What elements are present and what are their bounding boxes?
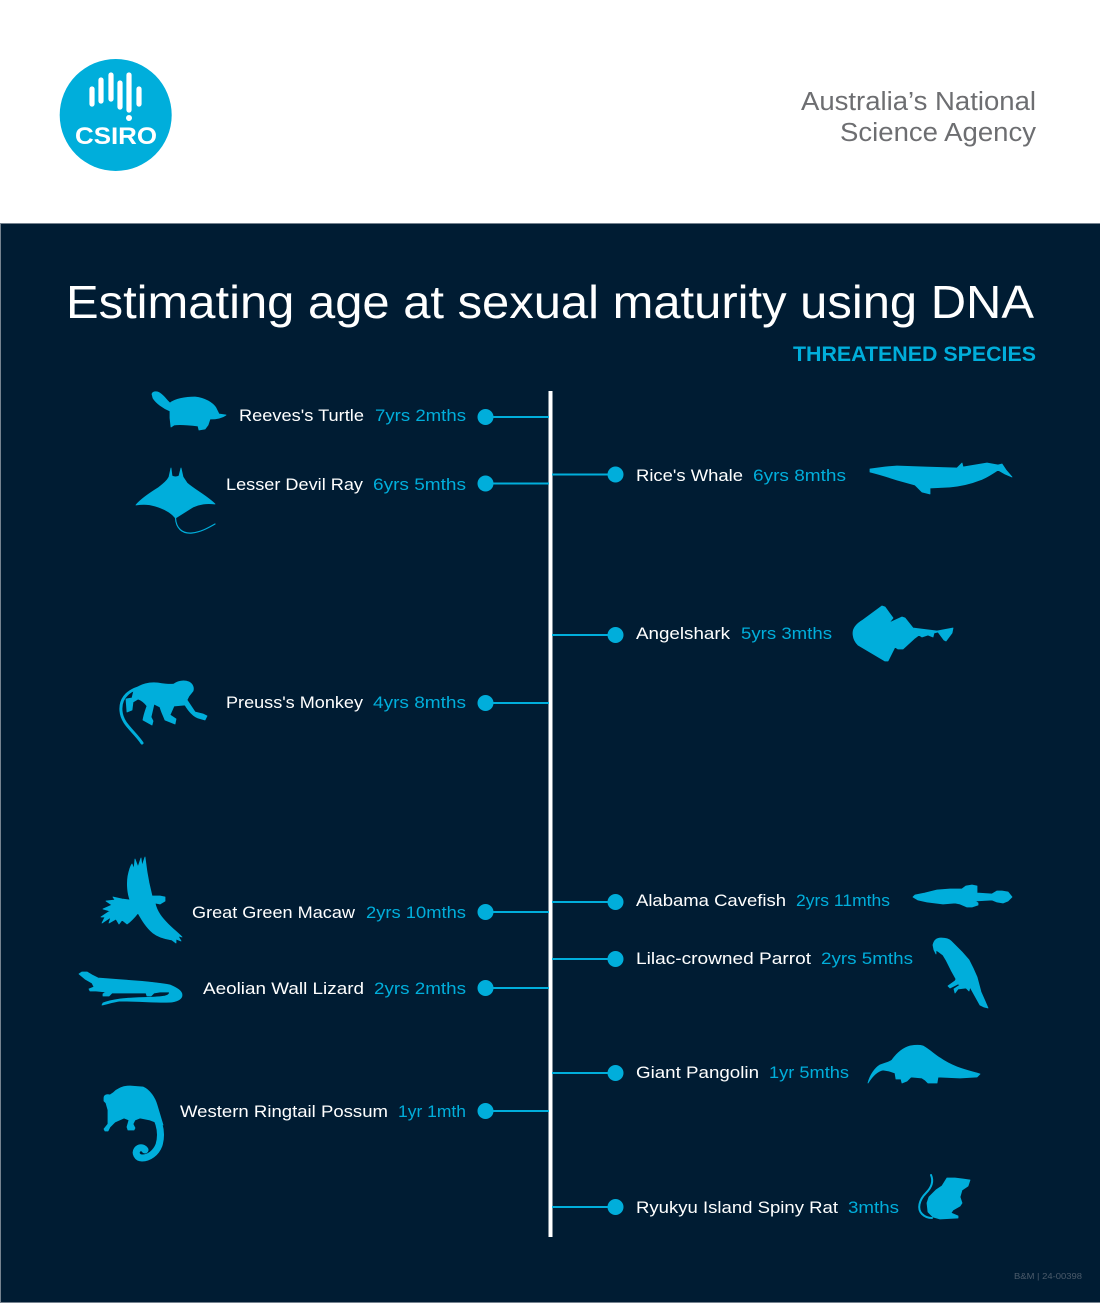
timeline axis xyxy=(548,391,552,1237)
entry: Preuss's Monkey: Preuss's Monkey xyxy=(226,694,364,712)
entry: Western Ringtail Possum xyxy=(104,1086,549,1158)
entry: Reeves's Turtle: 7yrs 2mths xyxy=(375,407,466,425)
CSIRO logo xyxy=(60,59,172,171)
entry: Lilac-crowned Parrot xyxy=(552,938,988,1008)
entry: Alabama Cavefish xyxy=(552,885,1012,910)
entry: Aeolian Wall Lizard: 2yrs 2mths xyxy=(374,980,466,998)
header band xyxy=(0,0,1100,223)
entry: Reeves's Turtle: Reeves's Turtle xyxy=(239,407,364,425)
entry: Giant Pangolin xyxy=(552,1045,980,1083)
entry: Lilac-crowned Parrot: 2yrs 5mths xyxy=(821,950,913,968)
entry: Lilac-crowned Parrot: Lilac-crowned Parrot xyxy=(636,950,811,968)
entry: Reeves's Turtle xyxy=(152,392,549,430)
entry: Rice's Whale: 6yrs 8mths xyxy=(753,467,846,485)
tagline xyxy=(801,88,1036,147)
entry: Ryukyu Island Spiny Rat: 3mths xyxy=(848,1199,899,1217)
entry: Great Green Macaw: 2yrs 10mths xyxy=(366,904,466,922)
entry: Great Green Macaw: Great Green Macaw xyxy=(192,904,355,922)
entry: Rice's Whale: Rice's Whale xyxy=(636,467,743,485)
entry: Aeolian Wall Lizard: Aeolian Wall Lizard xyxy=(203,980,364,998)
entry: Ryukyu Island Spiny Rat: Ryukyu Island Spiny Rat xyxy=(636,1199,838,1217)
entry: Giant Pangolin: Giant Pangolin xyxy=(636,1064,759,1082)
entry: Rice's Whale xyxy=(552,463,1012,494)
entry: Alabama Cavefish: Alabama Cavefish xyxy=(636,892,786,910)
subtitle: threatened species: THREATENED SPECIES xyxy=(793,343,1036,366)
entry: Western Ringtail Possum: Western Ringtail Possum xyxy=(180,1103,388,1121)
entry: Angelshark xyxy=(552,606,953,661)
title: Estimating age at sexual maturity using DNA xyxy=(66,276,1034,328)
entry: Ryukyu Island Spiny Rat xyxy=(552,1175,970,1219)
tagline: Australia’s National xyxy=(801,88,1036,116)
entry: Aeolian Wall Lizard xyxy=(79,972,549,1005)
job reference: B&M | 24-00398 xyxy=(1014,1271,1082,1281)
entry: Giant Pangolin: 1yr 5mths xyxy=(769,1064,849,1082)
entry: Lesser Devil Ray: 6yrs 5mths xyxy=(373,476,466,494)
entry: Lesser Devil Ray xyxy=(136,468,549,533)
entry: Lesser Devil Ray: Lesser Devil Ray xyxy=(226,476,364,494)
entry: Western Ringtail Possum: 1yr 1mth xyxy=(398,1103,466,1121)
tagline: Science Agency xyxy=(840,119,1036,147)
CSIRO logo: CSIRO xyxy=(75,123,157,150)
entry: Preuss's Monkey xyxy=(121,681,549,743)
entry: Preuss's Monkey: 4yrs 8mths xyxy=(373,694,466,712)
entry: Alabama Cavefish: 2yrs 11mths xyxy=(796,892,890,910)
entry: Angelshark: Angelshark xyxy=(636,625,731,643)
entry: Angelshark: 5yrs 3mths xyxy=(741,625,832,643)
entry: Great Green Macaw xyxy=(101,857,549,943)
